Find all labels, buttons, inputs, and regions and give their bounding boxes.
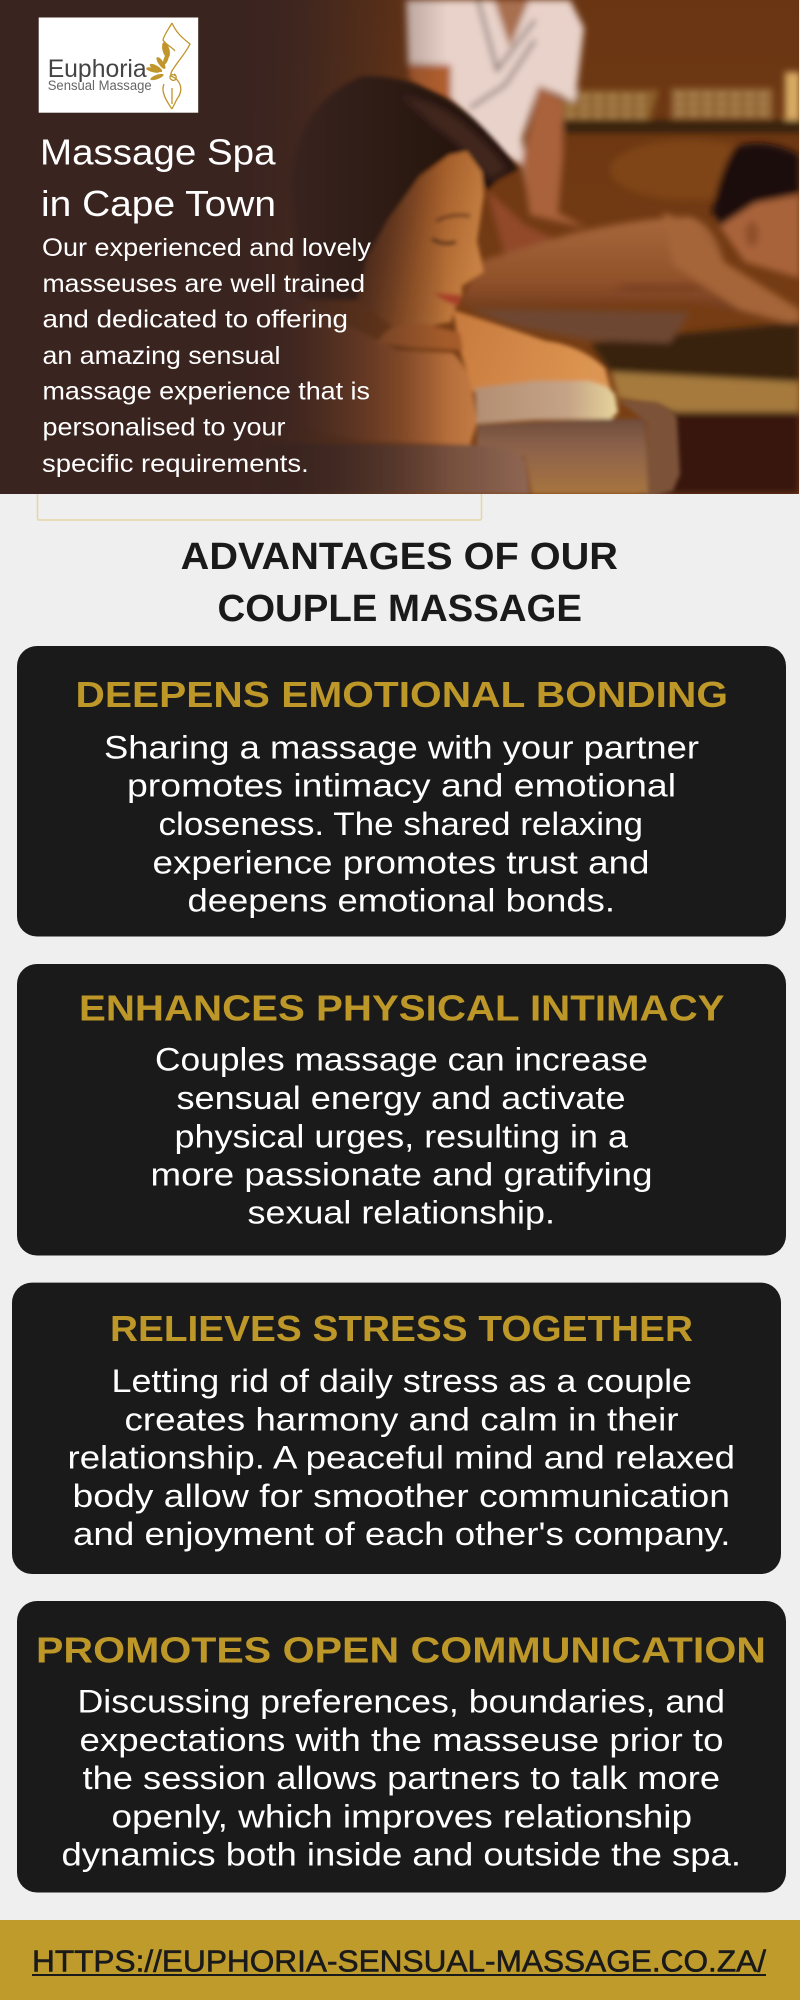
card text: closeness. The shared relaxing [158, 806, 643, 842]
footer band with website link [0, 1920, 800, 2000]
panel: deepens emotional bonding [17, 646, 786, 936]
hero intro text: personalised to your [42, 414, 286, 442]
table cushions [618, 400, 680, 499]
card text: and enjoyment of each other's company. [73, 1516, 730, 1552]
logo: Sensual Massage [48, 78, 152, 93]
card text: experience promotes trust and [152, 845, 650, 881]
card text: physical urges, resulting in a [174, 1119, 628, 1155]
man's head [714, 195, 800, 278]
hero intro text: masseuses are well trained [42, 270, 365, 298]
baskets [563, 88, 773, 122]
card title: RELIEVES STRESS TOGETHER [110, 1308, 693, 1349]
panel: enhances physical intimacy [17, 964, 786, 1256]
towel [475, 381, 618, 424]
woman's hair [290, 76, 518, 300]
therapist shirt [406, 0, 584, 210]
hero intro text: and dedicated to offering [42, 306, 348, 334]
panel: relieves stress together [12, 1283, 781, 1574]
hands under chin [377, 324, 463, 350]
card text: openly, which improves relationship [112, 1798, 692, 1834]
card text: deepens emotional bonds. [188, 883, 615, 919]
section heading: COUPLE MASSAGE [218, 588, 582, 630]
card text: creates harmony and calm in their [124, 1402, 679, 1438]
card text: more passionate and gratifying [150, 1157, 652, 1193]
card text: dynamics both inside and outside the spa. [62, 1837, 741, 1873]
card text [62, 1684, 741, 1873]
dark left overlay [0, 0, 440, 494]
card text [104, 730, 699, 919]
card title: ENHANCES PHYSICAL INTIMACY [79, 988, 724, 1028]
card text: sexual relationship. [248, 1195, 555, 1231]
hero photo: couple massage scene [0, 0, 800, 499]
logo: Euphoria [48, 55, 147, 83]
section heading [181, 536, 618, 630]
man's back and arm [460, 217, 800, 326]
woman's shoulder and arm [348, 330, 479, 448]
card text: Discussing preferences, boundaries, and [78, 1684, 725, 1720]
woman's face [357, 151, 484, 327]
icon: golden figure with leaves [146, 23, 190, 109]
card text: Couples massage can increase [155, 1042, 648, 1078]
card text: Letting rid of daily stress as a couple [112, 1363, 692, 1399]
hero intro text [42, 234, 372, 478]
therapist arms [408, 65, 451, 100]
website url: HTTPS://EUPHORIA-SENSUAL-MASSAGE.CO.ZA/ [32, 1944, 766, 1979]
card text [68, 1363, 735, 1552]
second table [590, 322, 800, 382]
outlined box below hero [38, 494, 482, 520]
hero heading: in Cape Town [41, 183, 276, 224]
card text: sensual energy and activate [176, 1080, 626, 1116]
hero heading [40, 132, 277, 224]
hero intro text: specific requirements. [42, 450, 309, 478]
card text: expectations with the masseuse prior to [80, 1722, 724, 1758]
card title: PROMOTES OPEN COMMUNICATION [36, 1629, 766, 1670]
section heading: ADVANTAGES OF OUR [181, 536, 618, 578]
hero intro text: an amazing sensual [42, 342, 280, 370]
card text: relationship. A peaceful mind and relaxed [68, 1440, 735, 1476]
woman's forearm [453, 310, 611, 392]
card text: promotes intimacy and emotional [127, 768, 676, 804]
card text [150, 1042, 652, 1231]
card text: the session allows partners to talk more [82, 1760, 720, 1796]
card text: Sharing a massage with your partner [104, 730, 699, 766]
card title: DEEPENS EMOTIONAL BONDING [76, 674, 728, 715]
panel: promotes open communication [17, 1601, 786, 1892]
hero intro text: Our experienced and lovely [42, 234, 372, 262]
hero intro text: massage experience that is [42, 378, 370, 406]
hero heading: Massage Spa [40, 132, 277, 172]
logo [39, 18, 198, 113]
card text: body allow for smoother communication [72, 1478, 730, 1514]
